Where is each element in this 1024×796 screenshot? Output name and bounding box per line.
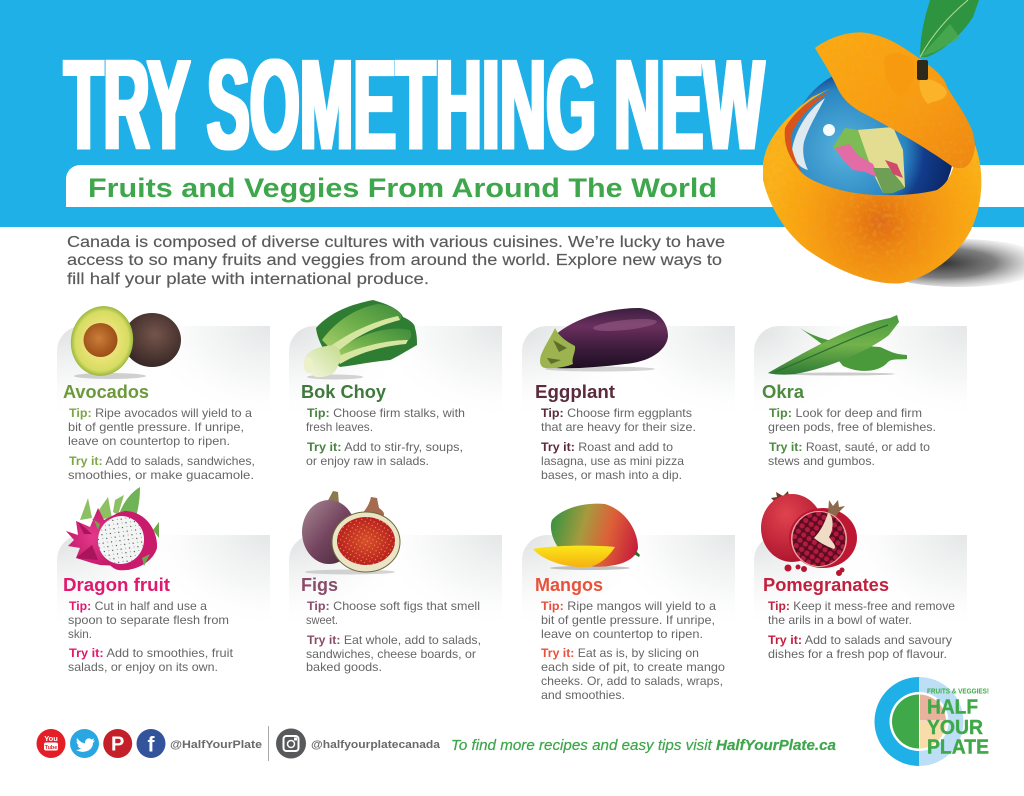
tip and try-it text: baked goods. [306,660,382,674]
heading: Dragon fruit [63,575,170,595]
tip and try-it text: and smoothies. [541,688,625,702]
tip and try-it text: cheeks. Or, add to salads, wraps, [541,674,723,688]
logo: half your plate: PLATE [927,736,989,758]
icon: mango [533,504,640,570]
intro text: access to so many fruits and veggies from around the world. Explore new ways to [67,252,722,269]
tip and try-it text: Tip: Keep it mess-free and remove [768,599,955,613]
panel: okra [754,315,967,484]
tip and try-it text: Tip: Choose firm eggplants [541,406,692,420]
panel: mangos [522,504,735,702]
icon: dragon fruit [66,487,159,570]
tip and try-it text: lasagna, use as mini pizza [541,454,684,468]
icon: eggplant [540,308,668,372]
tip and try-it text [541,406,696,482]
tip and try-it text: Tip: Choose soft figs that smell [307,599,480,613]
intro text: Canada is composed of diverse cultures with various cuisines. We’re lucky to have [67,234,725,251]
panel: eggplant [522,308,735,484]
tip and try-it text: Try it: Add to smoothies, fruit [69,646,234,660]
tip and try-it text: Tip: Ripe avocados will yield to a [69,406,252,420]
tip and try-it text: green pods, free of blemishes. [768,420,936,434]
tip and try-it text: sandwiches, cheese boards, or [306,647,476,661]
icon: pomegranate [761,491,857,576]
icon: instagram [276,728,306,758]
tip and try-it text: salads, or enjoy on its own. [68,660,218,674]
tip and try-it text [306,406,465,468]
handle: instagram: @halfyourplatecanada [311,739,441,751]
icon: youtube: You [44,734,58,743]
panel: avocados [57,300,270,484]
intro text [67,234,725,288]
tip and try-it text: Tip: Ripe mangos will yield to a [541,599,716,613]
icon: pinterest [103,729,132,758]
tip and try-it text: Try it: Eat as is, by slicing on [541,646,699,660]
logo: half your plate: FRUITS & VEGGIES! [927,686,989,696]
tip and try-it text: Try it: Eat whole, add to salads, [307,633,481,647]
panel: pomegranates [754,491,967,693]
call to action: To find more recipes and easy tips visit HalfYourPlate.ca [451,738,836,754]
panel: figs [289,491,502,693]
icon: facebook: f [148,734,156,756]
icon: twitter [70,729,99,758]
tip and try-it text [768,599,955,661]
intro text: fill half your plate with international produce. [67,271,429,288]
heading: Okra [762,382,805,402]
icon: youtube [36,729,66,758]
logo: half your plate: HALF [927,696,978,718]
subtitle banner [66,165,1024,207]
tip and try-it text: Tip: Cut in half and use a [69,599,207,613]
panel: dragon fruit [57,487,270,693]
logo: half your plate [874,677,989,766]
icon: youtube: Tube [45,745,57,751]
tip and try-it text: leave on countertop to ripen. [541,627,703,641]
tip and try-it text [68,406,255,482]
heading: Eggplant [535,382,615,402]
heading: Bok Choy [301,382,386,402]
icon: pinterest: P [111,734,124,756]
heading: Mangos [535,575,603,595]
tip and try-it text: bit of gentle pressure. If unripe, [68,420,244,434]
tip and try-it text: each side of pit, to create mango [541,660,725,674]
tip and try-it text [541,599,725,702]
tip and try-it text: bases, or mash into a dip. [541,468,682,482]
tip and try-it text [768,406,936,468]
icon: facebook [136,729,166,758]
panel: bok choy [289,300,502,484]
tip and try-it text: sweet. [306,613,338,627]
icon: figs [302,491,400,574]
tip and try-it text: smoothies, or make guacamole. [68,468,254,482]
header band [0,0,1024,227]
tip and try-it text: stews and gumbos. [768,454,875,468]
tip and try-it text: Try it: Add to salads and savoury [768,633,952,647]
tip and try-it text: the arils in a bowl of water. [768,613,912,627]
tip and try-it text: skin. [68,627,92,641]
handle: half your plate: @HalfYourPlate [170,739,262,751]
tip and try-it text: or enjoy raw in salads. [306,454,429,468]
icon: orange peeled around a globe [763,0,1024,287]
tip and try-it text: Try it: Add to salads, sandwiches, [69,454,255,468]
tip and try-it text [306,599,481,674]
tip and try-it text: Tip: Choose firm stalks, with [307,406,465,420]
heading: Pomegranates [763,575,889,595]
tip and try-it text [68,599,234,674]
icon: okra [768,315,907,376]
tip and try-it text: dishes for a fresh pop of flavour. [768,647,947,661]
logo: half your plate: YOUR [927,716,983,739]
subtitle: Fruits and Veggies From Around The World [88,173,717,203]
tip and try-it text: Try it: Roast, sauté, or add to [769,440,930,454]
tip and try-it text: fresh leaves. [306,420,373,434]
icon: bok choy [304,300,417,380]
tip and try-it text: Tip: Look for deep and firm [769,406,922,420]
tip and try-it text: that are heavy for their size. [541,420,696,434]
tip and try-it text: leave on countertop to ripen. [68,434,230,448]
tip and try-it text: spoon to separate flesh from [68,613,229,627]
heading: Avocados [63,382,149,402]
icon: avocado [64,300,181,382]
tip and try-it text: Try it: Roast and add to [541,440,673,454]
tip and try-it text: bit of gentle pressure. If unripe, [541,613,715,627]
tip and try-it text: Try it: Add to stir-fry, soups, [307,440,463,454]
heading: Figs [301,575,338,595]
